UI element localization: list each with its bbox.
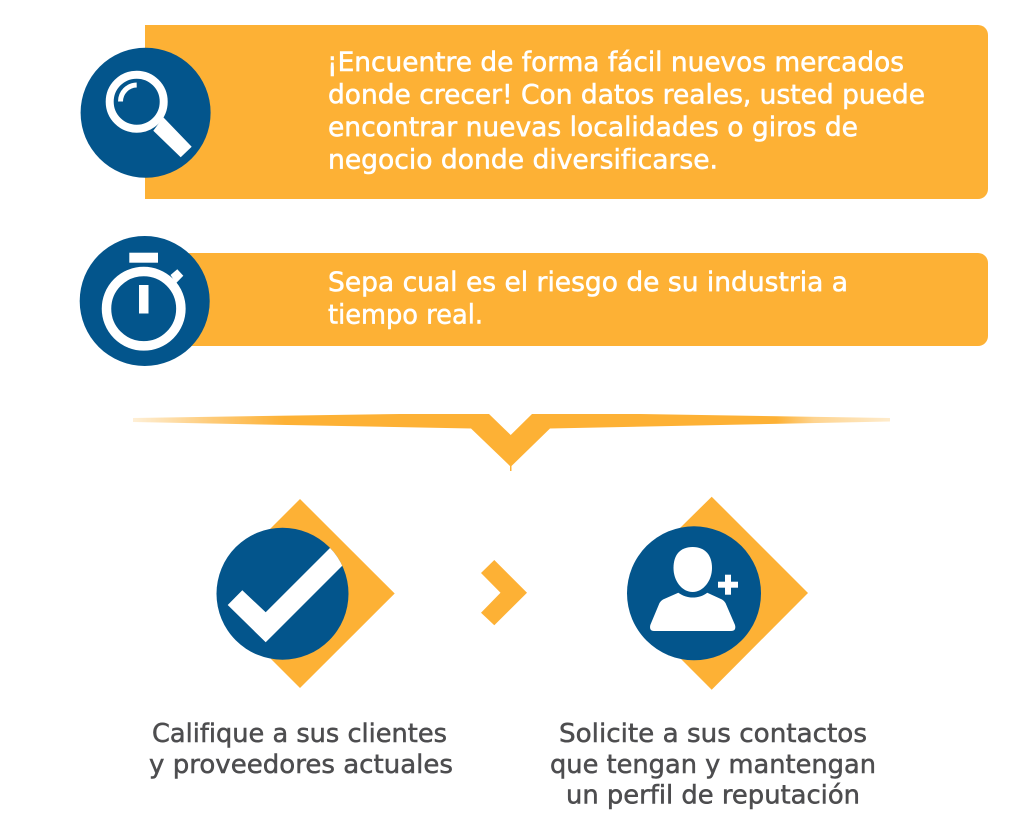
icon: stopwatch [80,236,210,366]
icon: check mark [216,528,350,660]
label: y proveedores actuales [149,750,453,780]
panel text: Sepa cual es el riesgo de su industria a [328,267,848,298]
label: un perfil de reputación [566,780,860,810]
diamond [680,497,808,690]
label: que tengan y mantengan [550,750,876,780]
diamond [268,499,395,688]
label: Solicite a sus contactos [559,719,867,749]
icon: magnifying glass [81,48,211,178]
step: califique [149,499,453,780]
step: solicite [550,497,876,810]
label [550,719,876,810]
panel text [327,47,925,176]
panel text [328,267,848,330]
panel: encuentre nuevos mercados [145,25,988,199]
panel text: ¡Encuentre de forma fácil nuevos mercados [327,47,904,78]
panel text: donde crecer! Con datos reales, usted puede [328,80,925,110]
panel text: tiempo real. [328,300,483,330]
panel background [145,25,988,199]
label: Califique a sus clientes [152,719,447,749]
icon: person with plus [627,526,761,660]
divider arrow [133,414,890,471]
arrow: chevron [481,560,527,625]
panel: riesgo de su industria [145,253,988,346]
panel background [145,253,988,346]
panel text: encontrar nuevas localidades o giros de [328,112,858,143]
label [149,719,453,780]
panel text: negocio donde diversificarse. [328,144,718,176]
